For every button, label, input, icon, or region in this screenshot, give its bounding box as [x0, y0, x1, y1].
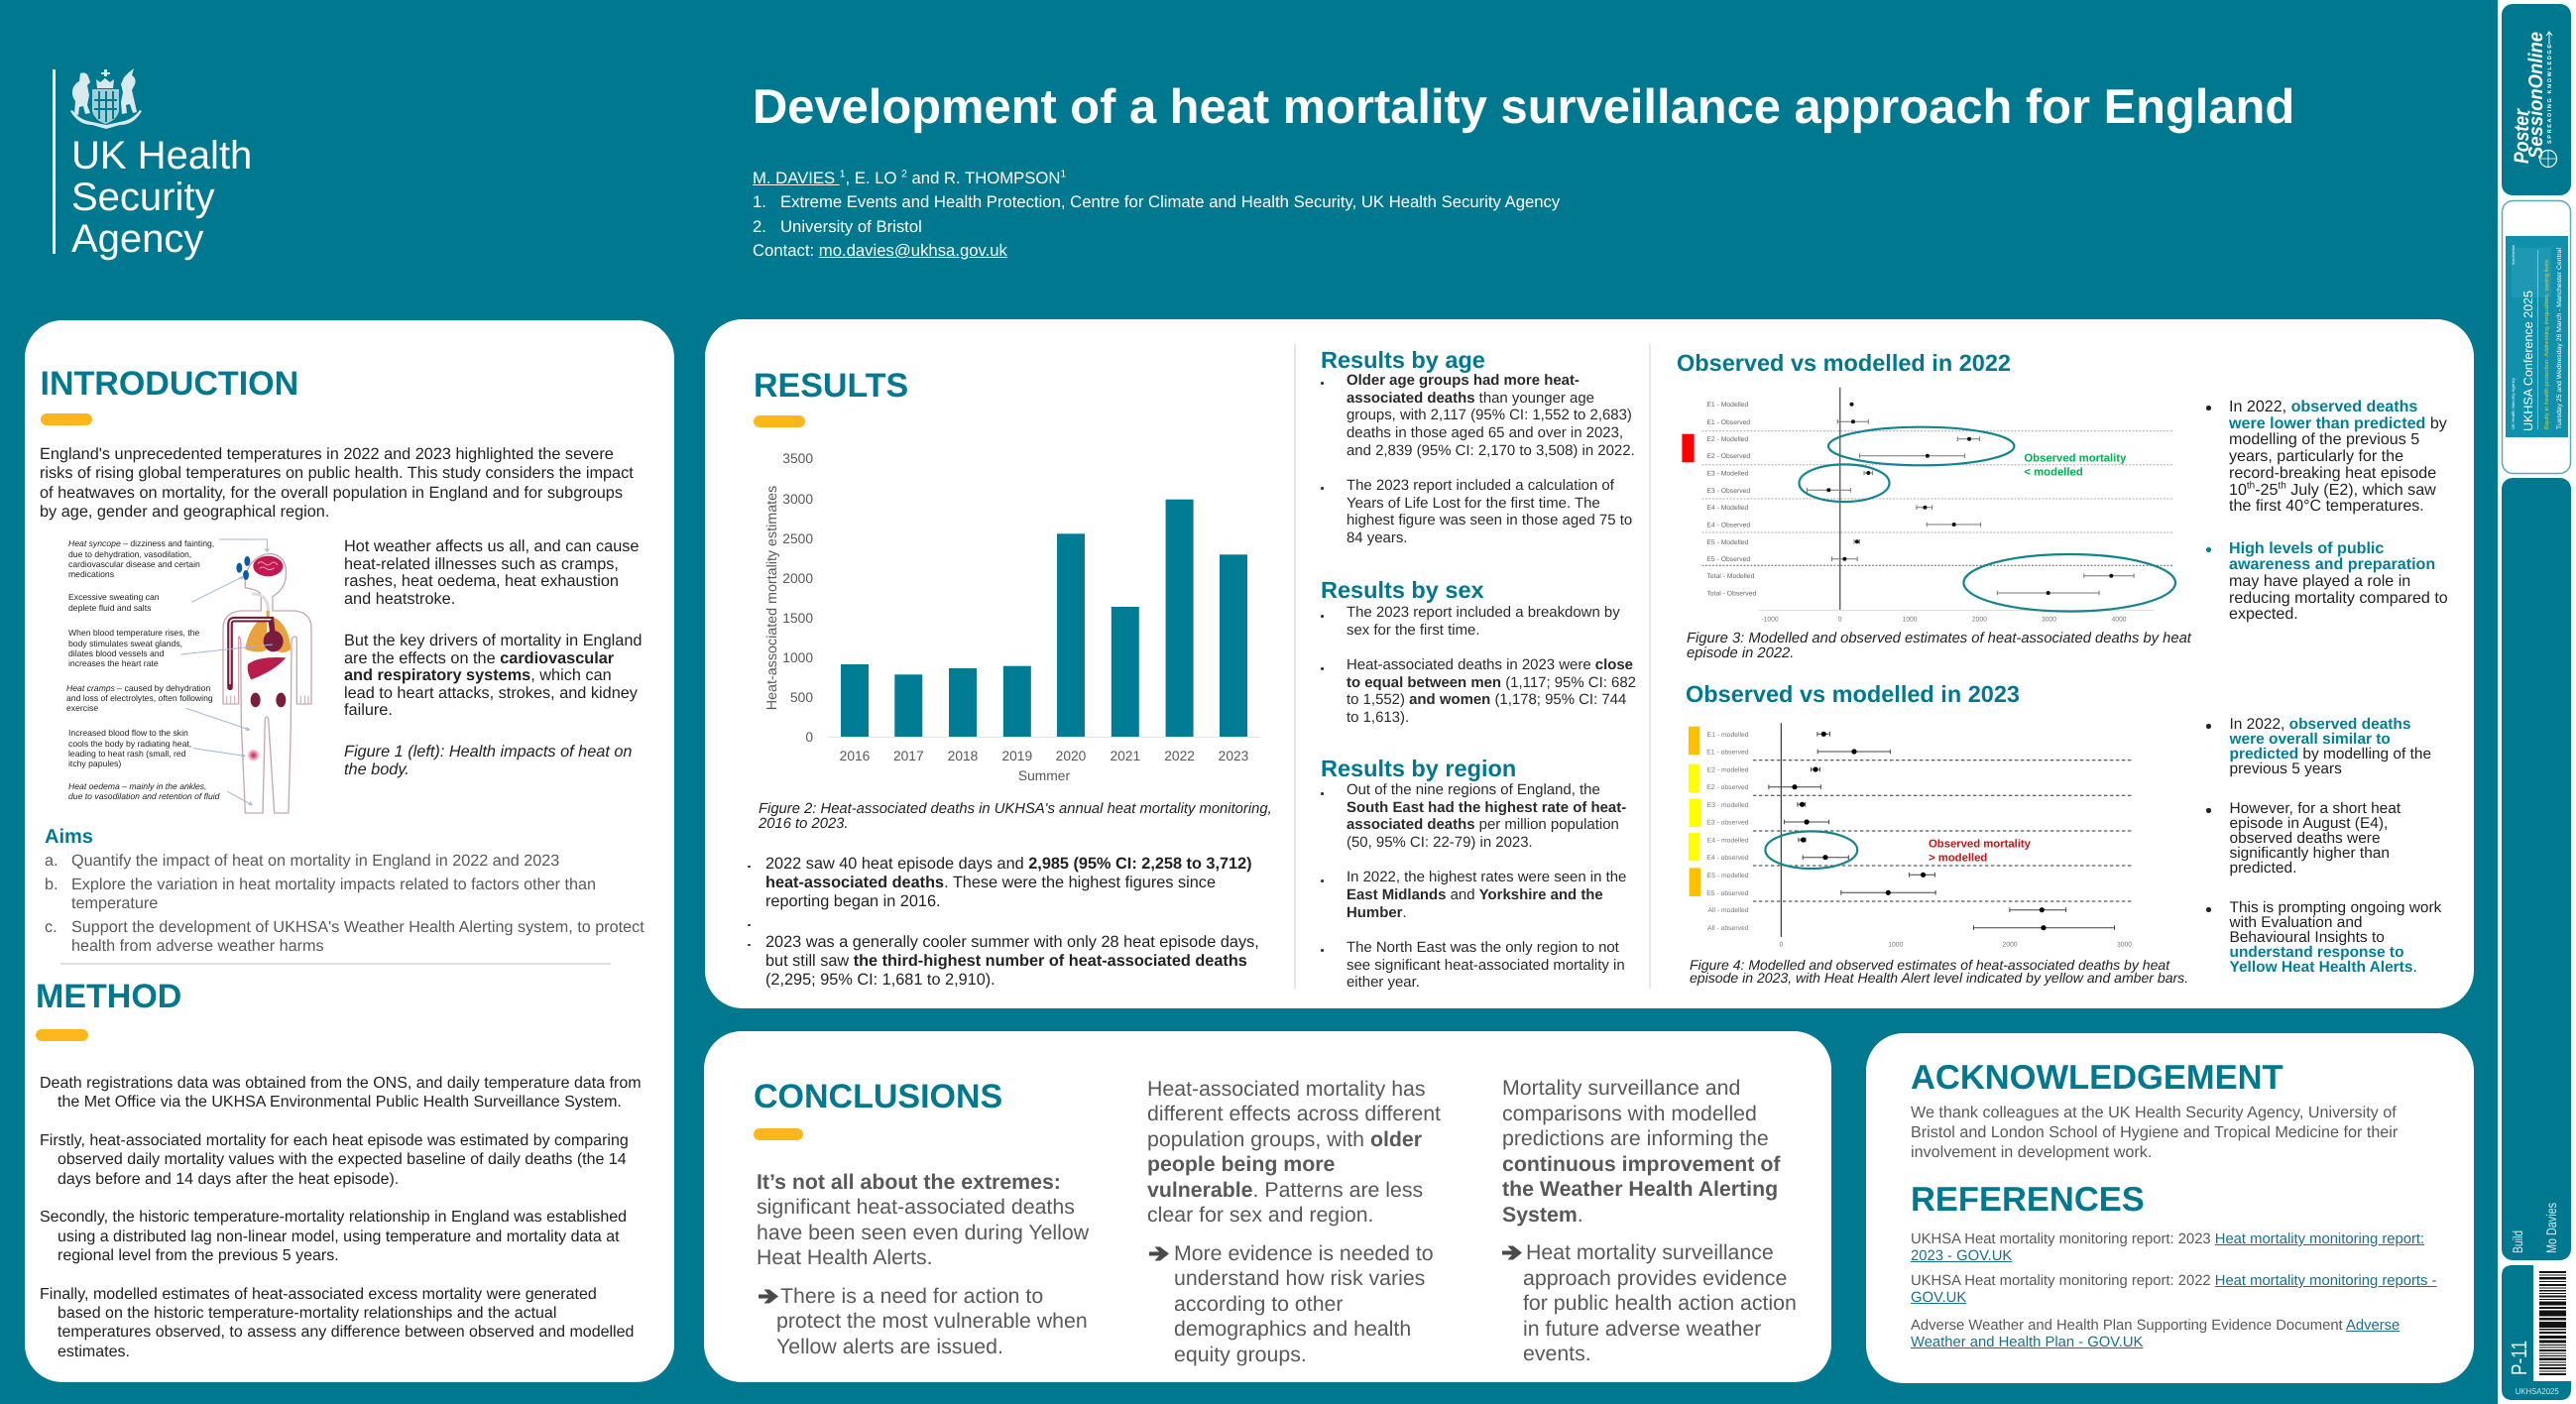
sidebar: poster session online logo: [2502, 4, 2571, 195]
bar chart: heat-associated deaths by summer: 2021: [1110, 749, 1140, 763]
figure 1 caption: [344, 743, 633, 777]
bar chart: heat-associated deaths by summer: Heat-associated mortality estimates: [764, 486, 780, 710]
heading: conclusions: CONCLUSIONS: [754, 1077, 1002, 1114]
method text: observed daily mortality values with the expected baseline of daily deaths (the 14: [58, 1151, 627, 1168]
results summary bullets: reporting began in 2016.: [765, 892, 941, 910]
figure 1: labels: medications: [68, 569, 114, 579]
results by age text: [1321, 372, 1635, 546]
accent bar: [41, 413, 92, 425]
text: heat illnesses: [344, 537, 639, 607]
results by region text: The North East was the only region to not: [1347, 939, 1619, 956]
authors and affiliations: Contact: mo.davies@ukhsa.gov.uk: [753, 241, 1007, 260]
forest plot: observed vs modelled 2022: E5 - Modelled: [1706, 539, 1749, 546]
panel: conclusions: [704, 1031, 1831, 1382]
2022 commentary bullets: the first 40°C temperatures.: [2229, 497, 2424, 515]
heading: acknowledgement: ACKNOWLEDGEMENT: [1911, 1059, 2283, 1097]
bar chart: heat-associated deaths by summer: [764, 451, 1260, 783]
2022 commentary bullets: reducing mortality compared to: [2229, 589, 2448, 607]
introduction text: England's unprecedented temperatures in 2022 and 2023 highlighted the severe: [40, 445, 614, 463]
figure 1: labels: When blood temperature rises, the: [68, 628, 200, 638]
forest plot: observed vs modelled 2023: 2000: [2002, 942, 2018, 948]
forest plot: observed vs modelled 2023: > modelled: [1929, 852, 1987, 864]
forest plot: observed vs modelled 2023: E5 - modelled: [1707, 873, 1749, 879]
forest plot: observed vs modelled 2022: 0: [1838, 617, 1842, 623]
aims list: health from adverse weather harms: [71, 937, 324, 955]
title: Development of a heat mortality surveillance approach for England: [753, 80, 2294, 134]
2023 commentary bullets: significantly higher than: [2229, 845, 2390, 862]
bar chart: heat-associated deaths by summer: 2500: [782, 531, 813, 546]
text: key drivers: failure.: [344, 701, 393, 719]
results by region text: either year.: [1347, 974, 1420, 991]
aims list: temperature: [71, 894, 158, 912]
figure 1: labels: dilates blood vessels and: [68, 648, 165, 658]
bar chart: heat-associated deaths by summer: 500: [790, 690, 813, 705]
forest plot: observed vs modelled 2022: E3 - Observed: [1706, 488, 1750, 495]
sidebar: build and author: Build: [2510, 1230, 2525, 1253]
authors and affiliations: M. DAVIES 1, E. LO 2 and R. THOMPSON1: [753, 169, 1066, 187]
panel: introduction and method: [25, 320, 674, 1382]
authors and affiliations: 1.: [753, 192, 766, 211]
results by region text: associated deaths per million population: [1347, 816, 1619, 833]
conclusion column 3: System.: [1502, 1203, 1583, 1227]
forest plot: observed vs modelled 2023: [1689, 723, 2132, 948]
2023 commentary bullets: were overall similar to: [2229, 731, 2391, 748]
conclusion column 2: Heat-associated mortality has: [1147, 1077, 1426, 1101]
results by age text: deaths in those aged 65 and over in 2023,: [1347, 424, 1623, 441]
bar chart: heat-associated deaths by summer: 2022: [1164, 749, 1195, 763]
method text: using a distributed lag non-linear model, using temperature and mortality data at: [58, 1228, 620, 1245]
text: heat illnesses: and heatstroke.: [344, 589, 455, 607]
2023 commentary bullets: However, for a short heat: [2229, 800, 2400, 817]
forest plot: observed vs modelled 2023: E2 - observed: [1706, 784, 1749, 791]
accent bar: [754, 1128, 803, 1140]
aims list: [45, 851, 644, 955]
bar chart: heat-associated deaths by summer: 2016: [840, 749, 871, 763]
bar chart: heat-associated deaths by summer: 2018: [948, 749, 979, 763]
2022 commentary bullets: High levels of public: [2229, 539, 2384, 557]
aims list: Quantify the impact of heat on mortality in England in 2022 and 2023: [71, 851, 559, 869]
conclusion column 3: continuous improvement of: [1502, 1152, 1780, 1176]
conclusion column 2: clear for sex and region.: [1147, 1203, 1373, 1227]
figure 1: labels: and loss of electrolytes, often following: [66, 693, 213, 703]
text: key drivers: are the effects on the cardiovascular: [344, 648, 614, 666]
results by region text: East Midlands and Yorkshire and the: [1347, 886, 1603, 903]
method text: Finally, modelled estimates of heat-associated excess mortality were generated: [40, 1286, 597, 1303]
authors and affiliations: 2.: [753, 217, 766, 236]
introduction text: by age, gender and geographical region.: [40, 503, 329, 521]
2022 commentary bullets: 10th-25th July (E2), which saw: [2229, 480, 2436, 499]
logo: UK Health Security Agency: Agency: [71, 217, 203, 261]
results summary bullets: but still saw the third-highest number of heat-associated deaths: [765, 952, 1247, 970]
2022 commentary bullets: years, particularly for the: [2229, 447, 2403, 465]
results summary bullets: 2023 was a generally cooler summer with only 28 heat episode days,: [765, 932, 1259, 950]
method text: based on the historic temperature-mortality relationships and the actual: [58, 1305, 556, 1322]
results by region text: see significant heat-associated mortality in: [1347, 957, 1625, 974]
text: key drivers: and respiratory systems, which can: [344, 666, 612, 684]
method text: the Met Office via the UKHSA Environmental Public Health Surveillance System.: [58, 1094, 622, 1111]
figure 1: labels: deplete fluid and salts: [68, 603, 151, 613]
2023 commentary bullets: understand response to: [2229, 944, 2404, 961]
panel: results: [705, 319, 2474, 1008]
sidebar: UKHSA conference banner: Tuesday 25 and Wednesday 26 March - Manchester Central: [2556, 247, 2563, 429]
forest plot: observed vs modelled 2023: All - modelled: [1707, 907, 1749, 914]
bar chart: heat-associated deaths by summer: 2019: [1001, 749, 1032, 763]
heading: results by age: Results by age: [1321, 347, 1485, 373]
2023 commentary bullets: predicted.: [2229, 860, 2296, 877]
method text: [40, 1075, 642, 1360]
figure 4 caption: [1690, 957, 2188, 986]
text: key drivers: [344, 632, 642, 719]
results by age text: associated deaths than younger age: [1347, 390, 1594, 407]
reference 3: Weather and Health Plan - GOV.UK: [1911, 1335, 2143, 1350]
conclusion column 1: Yellow alerts are issued.: [776, 1335, 1003, 1358]
reference 1: 2023 - GOV.UK: [1911, 1248, 2012, 1264]
forest plot: observed vs modelled 2023: E5 - observed: [1706, 890, 1749, 897]
forest plot: observed vs modelled 2023: E4 - observed: [1706, 855, 1749, 862]
2023 commentary bullets: Behavioural Insights to: [2229, 929, 2385, 946]
figure 1: labels: Heat oedema – mainly in the ankles,: [68, 781, 207, 791]
figure 1: labels: leading to heat rash (small, red: [68, 749, 186, 759]
bar chart: heat-associated deaths by summer: 3000: [782, 492, 813, 507]
forest plot: observed vs modelled 2023: E1 - observed: [1706, 750, 1749, 756]
results summary bullets: (2,295; 95% CI: 1,681 to 2,910).: [765, 971, 995, 989]
results by sex text: to equal between men (1,117; 95% CI: 682: [1347, 674, 1636, 691]
conclusion column 2: More evidence is needed to: [1174, 1241, 1434, 1265]
2023 commentary bullets: In 2022, observed deaths: [2229, 716, 2410, 733]
reference 3: Adverse Weather and Health Plan Supporting Evidence Document Adverse: [1911, 1318, 2400, 1334]
forest plot: observed vs modelled 2022: E4 - Observed: [1706, 522, 1750, 529]
text: key drivers: But the key drivers of mortality in England: [344, 632, 642, 649]
introduction text: of heatwaves on mortality, for the overall population in England and for subgroups: [40, 484, 623, 502]
forest plot: observed vs modelled 2022: Total - Modelled: [1706, 573, 1755, 580]
2023 commentary bullets: observed deaths were: [2229, 830, 2381, 847]
accent bar: [754, 415, 805, 427]
bar chart: heat-associated deaths by summer: 1000: [782, 650, 813, 665]
aims list: a.: [45, 851, 59, 869]
aims list: Explore the variation in heat mortality impacts related to factors other than: [71, 875, 596, 892]
figure 1 caption: Figure 1 (left): Health impacts of heat on: [344, 743, 633, 760]
text: heat illnesses: rashes, heat oedema, heat exhaustion: [344, 572, 619, 590]
figure 1: labels: [66, 538, 221, 801]
figure 4 caption: Figure 4: Modelled and observed estimates of heat-associated deaths by heat: [1690, 957, 2169, 973]
2022 commentary bullets: expected.: [2229, 605, 2298, 623]
sidebar: UKHSA conference banner: [2503, 200, 2570, 474]
forest plot: observed vs modelled 2023: Observed mortality: [1929, 838, 2032, 850]
heading: references: REFERENCES: [1911, 1181, 2145, 1219]
2022 commentary bullets: [2206, 398, 2448, 623]
conclusion column 2: according to other: [1174, 1292, 1343, 1316]
conclusion column 2: population groups, with older: [1147, 1127, 1422, 1151]
bar chart: heat-associated deaths by summer: 2023: [1219, 749, 1249, 763]
figure 1 caption: the body.: [344, 760, 410, 777]
results by sex text: to 1,552) and women (1,178; 95% CI: 744: [1347, 691, 1626, 708]
results summary bullets: [748, 855, 1259, 989]
figure 1: human body diagram: [180, 539, 311, 813]
logo: UK Health Security Agency: [53, 68, 252, 261]
results by age text: and 2,839 (95% CI: 2,170 to 3,508) in 2022.: [1347, 442, 1635, 459]
heading: introduction: INTRODUCTION: [40, 365, 298, 403]
forest plot: observed vs modelled 2023: E3 - observed: [1706, 819, 1749, 827]
2023 commentary bullets: episode in August (E4),: [2229, 815, 2388, 832]
figure 1: labels: body stimulates sweat glands,: [68, 639, 182, 648]
heading: method: METHOD: [36, 978, 181, 1015]
results summary bullets: 2022 saw 40 heat episode days and 2,985 (95% CI: 2,258 to 3,712): [765, 855, 1252, 873]
method text: temperatures observed, to assess any difference between observed and modelled: [58, 1324, 634, 1341]
forest plot: observed vs modelled 2022: Observed mortality: [2024, 452, 2127, 464]
heading: results by region: Results by region: [1321, 756, 1516, 781]
sidebar: UKHSA conference banner: Faculty of Public Health: [2512, 245, 2516, 265]
results by sex text: [1321, 604, 1636, 726]
results by age text: 84 years.: [1347, 529, 1407, 546]
conclusion column 3: in future adverse weather: [1523, 1317, 1761, 1341]
sidebar: poster number and barcode: UKHSA2025: [2516, 1386, 2559, 1396]
bar chart: heat-associated deaths by summer: 1500: [782, 611, 813, 626]
forest plot: observed vs modelled 2022: -1000: [1761, 617, 1779, 623]
conclusion column 2: vulnerable. Patterns are less: [1147, 1178, 1423, 1202]
figure 4 caption: episode in 2023, with Heat Health Alert level indicated by yellow and amber bars.: [1690, 970, 2188, 986]
logo: UK Health Security Agency: Security: [71, 176, 214, 219]
2022 commentary bullets: record-breaking heat episode: [2229, 464, 2436, 482]
forest plot: observed vs modelled 2022: E5 - Observed: [1706, 556, 1750, 563]
2022 commentary bullets: awareness and preparation: [2229, 555, 2435, 573]
results by sex text: The 2023 report included a breakdown by: [1347, 604, 1620, 621]
results by age text: The 2023 report included a calculation of: [1347, 477, 1614, 494]
bar chart: heat-associated deaths by summer: 0: [805, 730, 813, 745]
forest plot: observed vs modelled 2022: 3000: [2042, 617, 2056, 623]
figure 1: labels: exercise: [66, 703, 98, 713]
forest plot: observed vs modelled 2022: E1 - Observed: [1706, 419, 1750, 426]
conclusion column 1: It’s not all about the extremes:: [757, 1170, 1061, 1194]
introduction text: risks of rising global temperatures on public health. This study considers the impact: [40, 464, 634, 482]
results by age text: Older age groups had more heat-: [1347, 372, 1580, 389]
heading: results: RESULTS: [754, 367, 908, 405]
2022 commentary bullets: may have played a role in: [2229, 572, 2410, 590]
reference 2: GOV.UK: [1911, 1290, 1966, 1306]
forest plot: observed vs modelled 2022: E3 - Modelled: [1706, 470, 1749, 478]
results by region text: (50, 95% CI: 22-79) in 2023.: [1347, 834, 1533, 851]
conclusion column 3: the Weather Health Alerting: [1502, 1177, 1778, 1201]
results by age text: Years of Life Lost for the first time. The: [1347, 495, 1600, 512]
bar chart: heat-associated deaths by summer: Summer: [1018, 768, 1070, 783]
figure 1: labels: due to dehydration, vasodilation,: [68, 549, 191, 559]
sidebar: UKHSA conference banner: UKHSA Conference 2025: [2521, 291, 2535, 431]
panel: acknowledgement and references: [1866, 1033, 2474, 1383]
results by age text: groups, with 2,117 (95% CI: 1,552 to 2,683): [1347, 407, 1632, 423]
text: heat illnesses: heat-related illnesses such as cramps,: [344, 555, 619, 573]
results by region text: Out of the nine regions of England, the: [1347, 781, 1600, 798]
reference 2: [1911, 1273, 2437, 1306]
results by region text: South East had the highest rate of heat-: [1347, 799, 1626, 816]
forest plot: observed vs modelled 2022: 2000: [1972, 617, 1987, 623]
sidebar strip: [2498, 0, 2576, 1404]
authors and affiliations: University of Bristol: [780, 217, 922, 236]
figure 1: labels: cools the body by radiating heat,: [68, 739, 191, 749]
figure 1: labels: Increased blood flow to the skin: [68, 728, 188, 738]
figure 1: labels: Heat cramps – caused by dehydration: [66, 683, 210, 693]
sidebar: build and author: Mo Davies: [2543, 1203, 2559, 1253]
heading: observed vs modelled 2023: Observed vs modelled in 2023: [1686, 681, 2020, 707]
2023 commentary bullets: with Evaluation and: [2229, 914, 2363, 931]
forest plot: observed vs modelled 2022: [1682, 388, 2175, 623]
conclusion column 2: demographics and health: [1174, 1317, 1411, 1341]
conclusion column 1: have been seen even during Yellow: [757, 1221, 1089, 1244]
figure 2 caption: 2016 to 2023.: [759, 815, 849, 831]
2022 commentary bullets: were lower than predicted by: [2229, 414, 2447, 432]
bar chart: heat-associated deaths by summer: 2000: [782, 571, 813, 586]
conclusion column 2: understand how risk varies: [1174, 1266, 1425, 1290]
conclusion column 1: significant heat-associated deaths: [757, 1195, 1075, 1219]
logo: UK Health Security Agency: UK Health: [71, 134, 252, 177]
bar chart: heat-associated deaths by summer: 2020: [1056, 749, 1087, 763]
2022 commentary bullets: modelling of the previous 5: [2229, 430, 2419, 448]
acknowledgement text: involvement in development work.: [1911, 1142, 2152, 1160]
reference 1: UKHSA Heat mortality monitoring report: 2023 Heat mortality monitoring report:: [1911, 1231, 2424, 1247]
authors and affiliations: Extreme Events and Health Protection, Centre for Climate and Health Security, UK Health Security Agency: [780, 192, 1560, 211]
figure 1: labels: Excessive sweating can: [68, 592, 160, 602]
2023 commentary bullets: [2206, 716, 2441, 976]
forest plot: observed vs modelled 2022: E4 - Modelled: [1706, 505, 1749, 512]
figure 3 caption: episode in 2022.: [1687, 644, 1794, 660]
conclusion column 3: approach provides evidence: [1523, 1266, 1787, 1290]
2023 commentary bullets: previous 5 years: [2229, 760, 2342, 777]
method text: estimates.: [58, 1344, 130, 1360]
forest plot: observed vs modelled 2023: 0: [1780, 942, 1784, 948]
forest plot: observed vs modelled 2022: E2 - Observed: [1706, 453, 1750, 460]
conclusion column 3: for public health action action: [1523, 1291, 1797, 1315]
heading: results by sex: Results by sex: [1321, 577, 1484, 603]
figure 2 caption: [758, 801, 1272, 831]
figure 1: labels: Heat syncope – dizziness and fainting,: [68, 538, 214, 548]
heading: aims: Aims: [45, 826, 93, 848]
forest plot: observed vs modelled 2023: E2 - modelled: [1707, 767, 1749, 773]
conclusion column 3: comparisons with modelled: [1502, 1102, 1757, 1125]
conclusion column 2: people being more: [1147, 1152, 1335, 1176]
sidebar: poster number and barcode: P-11: [2507, 1341, 2531, 1375]
forest plot: observed vs modelled 2023: E3 - modelled: [1707, 802, 1749, 809]
forest plot: observed vs modelled 2022: Total - Observed: [1706, 591, 1756, 597]
text: key drivers: lead to heart attacks, strokes, and kidney: [344, 684, 638, 702]
forest plot: observed vs modelled 2022: E2 - Modelled: [1706, 436, 1749, 443]
results by sex text: sex for the first time.: [1347, 622, 1479, 639]
conclusion column 3: Mortality surveillance and: [1502, 1076, 1740, 1100]
text: heat illnesses: Hot weather affects us all, and can cause: [344, 537, 639, 555]
conclusion column 1: [757, 1170, 1089, 1358]
aims list: c.: [45, 918, 58, 936]
sidebar: build and author: [2502, 478, 2571, 1260]
sidebar: poster session online logo: SessionOnline: [2525, 32, 2547, 159]
acknowledgement text: [1911, 1103, 2398, 1160]
reference 1: [1911, 1231, 2425, 1264]
results by region text: In 2022, the highest rates were seen in the: [1347, 869, 1626, 885]
accent bar: [36, 1029, 88, 1041]
method text: Firstly, heat-associated mortality for each heat episode was estimated by comparing: [40, 1132, 629, 1149]
forest plot: observed vs modelled 2023: 3000: [2117, 942, 2132, 948]
bar chart: heat-associated deaths by summer: 3500: [782, 451, 813, 466]
2023 commentary bullets: predicted by modelling of the: [2229, 746, 2431, 762]
conclusion column 3: [1502, 1076, 1797, 1365]
aims list: Support the development of UKHSA's Weather Health Alerting system, to protect: [71, 918, 644, 936]
conclusion column 2: equity groups.: [1174, 1343, 1307, 1366]
method text: Death registrations data was obtained from the ONS, and daily temperature data from: [40, 1075, 642, 1092]
2023 commentary bullets: This is prompting ongoing work: [2229, 899, 2441, 916]
2022 commentary bullets: In 2022, observed deaths: [2229, 398, 2417, 415]
results summary bullets: heat-associated deaths. These were the highest figures since: [765, 874, 1216, 891]
forest plot: observed vs modelled 2022: E1 - Modelled: [1706, 402, 1749, 409]
figure 1: labels: itchy papules): [68, 759, 121, 768]
conclusion column 1: There is a need for action to: [780, 1283, 1043, 1307]
forest plot: observed vs modelled 2023: All - observed: [1707, 925, 1749, 932]
reference 2: UKHSA Heat mortality monitoring report: 2022 Heat mortality monitoring reports -: [1911, 1273, 2436, 1289]
conclusion column 2: different effects across different: [1147, 1102, 1441, 1125]
sidebar: poster number and barcode: [2502, 1265, 2571, 1400]
method text: regional level from the previous 5 years.: [58, 1247, 339, 1264]
forest plot: observed vs modelled 2022: 4000: [2111, 617, 2127, 623]
figure 1: labels: due to vasodilation and retention of fluid: [68, 791, 221, 801]
sidebar: poster session online logo: Poster: [2511, 107, 2533, 164]
aims list: b.: [45, 875, 59, 892]
method text: Secondly, the historic temperature-mortality relationship in England was established: [40, 1209, 627, 1226]
method text: days before and 14 days after the heat episode).: [58, 1171, 399, 1188]
sidebar: UKHSA conference banner: UK Health Security Agency: [2511, 377, 2516, 429]
bar chart: heat-associated deaths by summer: 2017: [893, 749, 924, 763]
forest plot: observed vs modelled 2023: E1 - modelled: [1707, 732, 1749, 739]
introduction text: [40, 445, 634, 521]
figure 3 caption: [1687, 631, 2191, 660]
forest plot: observed vs modelled 2023: 1000: [1888, 942, 1904, 948]
acknowledgement text: We thank colleagues at the UK Health Security Agency, University of: [1911, 1103, 2397, 1120]
results by region text: Humber.: [1347, 904, 1407, 921]
conclusion column 2: [1147, 1077, 1441, 1366]
forest plot: observed vs modelled 2022: 1000: [1902, 617, 1918, 623]
2023 commentary bullets: Yellow Heat Health Alerts.: [2229, 959, 2417, 976]
forest plot: observed vs modelled 2022: < modelled: [2024, 466, 2083, 478]
figure 2 caption: Figure 2: Heat-associated deaths in UKHSA's annual heat mortality monitoring,: [759, 801, 1272, 817]
figure 1: labels: cardiovascular disease and certain: [68, 559, 200, 569]
results by region text: [1321, 781, 1626, 991]
acknowledgement text: Bristol and London School of Hygiene and Tropical Medicine for their: [1911, 1122, 2398, 1140]
conclusion column 3: predictions are informing the: [1502, 1126, 1769, 1150]
results by sex text: Heat-associated deaths in 2023 were close: [1347, 656, 1633, 673]
sidebar: UKHSA conference banner: Equity in health protection: Addressing inequalities, saving lives: [2543, 260, 2550, 429]
results by sex text: to 1,613).: [1347, 709, 1409, 726]
conclusion column 1: protect the most vulnerable when: [776, 1309, 1088, 1333]
conclusion column 1: Heat Health Alerts.: [757, 1245, 933, 1269]
conclusion column 3: Heat mortality surveillance: [1526, 1240, 1774, 1264]
figure 1: labels: increases the heart rate: [68, 658, 159, 668]
forest plot: observed vs modelled 2023: E4 - modelled: [1707, 837, 1749, 845]
heading: observed vs modelled 2022: Observed vs modelled in 2022: [1677, 350, 2011, 376]
sidebar: poster session online logo: SPREADING KNOWLEDGE: [2547, 45, 2553, 144]
reference 3: [1911, 1318, 2400, 1350]
figure 3 caption: Figure 3: Modelled and observed estimates of heat-associated deaths by heat: [1687, 631, 2191, 646]
conclusion column 3: events.: [1523, 1342, 1591, 1365]
authors and affiliations: [753, 169, 1561, 260]
results by age text: highest figure was seen in those aged 75 to: [1347, 512, 1632, 528]
